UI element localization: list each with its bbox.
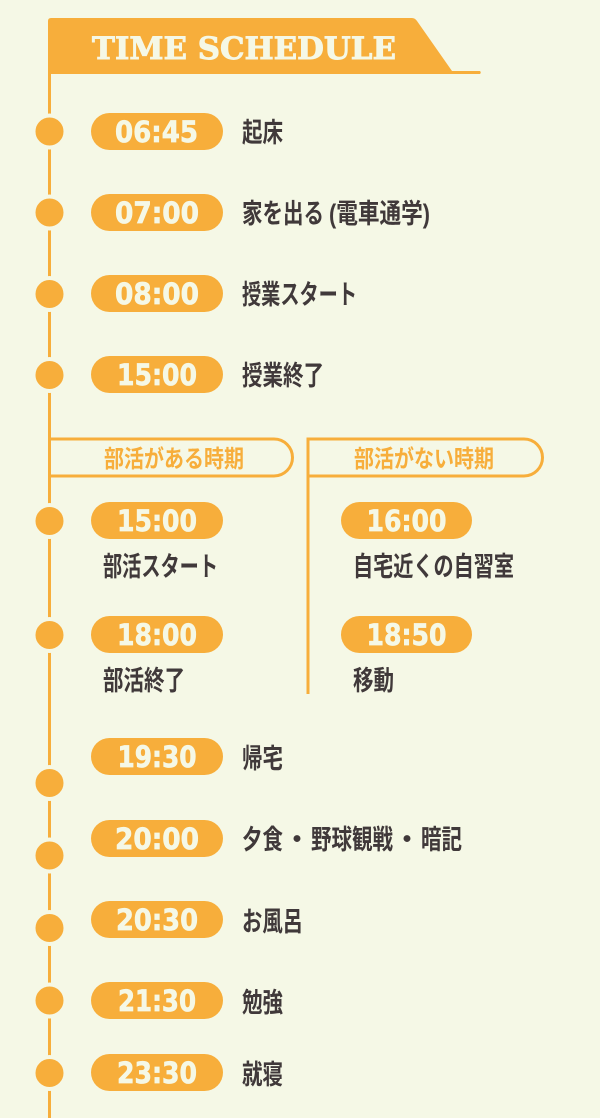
row 23:30: 就寝 [242, 1060, 283, 1090]
row 07:00: (電車通学) [329, 199, 430, 229]
row 20:30: 20:30 [116, 903, 198, 937]
panel: club season [50, 439, 292, 696]
row 23:30 [91, 1054, 283, 1091]
row 19:30 [91, 738, 283, 775]
row 07:00: 家を出る [242, 199, 324, 229]
row 20:00: 20:00 [115, 822, 199, 856]
row 08:00: 授業スタート [242, 280, 357, 310]
row 20:00: ・ [394, 825, 420, 855]
row 06:45 [91, 113, 283, 150]
row 20:00: 野球観戦 [311, 825, 393, 855]
item 18:50: 移動 [353, 666, 394, 696]
heading: club season [50, 439, 292, 476]
item 15:00 [91, 502, 223, 582]
item 15:00: 部活スタート [103, 552, 218, 582]
heading: no club season [308, 439, 542, 694]
row 23:30: 23:30 [117, 1056, 197, 1090]
row 08:00 [91, 275, 357, 312]
item 18:50 [341, 616, 472, 696]
row 06:45: 起床 [242, 118, 283, 148]
row 20:30: お風呂 [242, 907, 303, 937]
item 18:50: 18:50 [366, 618, 446, 652]
item 18:00: 部活終了 [103, 666, 185, 696]
row 21:30: 勉強 [242, 988, 283, 1018]
heading: no club season: 部活がない時期 [354, 445, 494, 473]
row 20:00: ・ [284, 825, 310, 855]
item 18:00 [91, 616, 223, 696]
row 15:00: 授業終了 [242, 361, 324, 391]
row 15:00: 15:00 [117, 358, 197, 392]
item 16:00: 自宅近くの自習室 [353, 552, 514, 582]
row 15:00 [91, 356, 324, 393]
item 18:00: 18:00 [117, 618, 197, 652]
item 16:00: 16:00 [366, 504, 446, 538]
item 15:00: 15:00 [117, 504, 197, 538]
title banner [48, 18, 481, 74]
row 20:00: 夕食 [242, 825, 283, 855]
timeline dots [34, 116, 66, 1089]
row 20:00 [91, 820, 462, 857]
panel: no club season [308, 439, 542, 696]
timeline line [48, 60, 51, 1118]
row 20:00: 暗記 [421, 825, 462, 855]
row 20:30 [91, 901, 303, 938]
title text: TIME SCHEDULE [92, 31, 396, 67]
row 21:30 [91, 982, 283, 1019]
row 21:30: 21:30 [118, 984, 196, 1018]
row 08:00: 08:00 [115, 277, 199, 311]
heading: club season: 部活がある時期 [104, 445, 244, 473]
row 19:30: 19:30 [118, 740, 196, 774]
item 16:00 [341, 502, 514, 582]
row 06:45: 06:45 [115, 115, 198, 149]
row 19:30: 帰宅 [242, 744, 283, 774]
row 07:00: 07:00 [115, 196, 199, 230]
row 07:00 [91, 194, 430, 231]
